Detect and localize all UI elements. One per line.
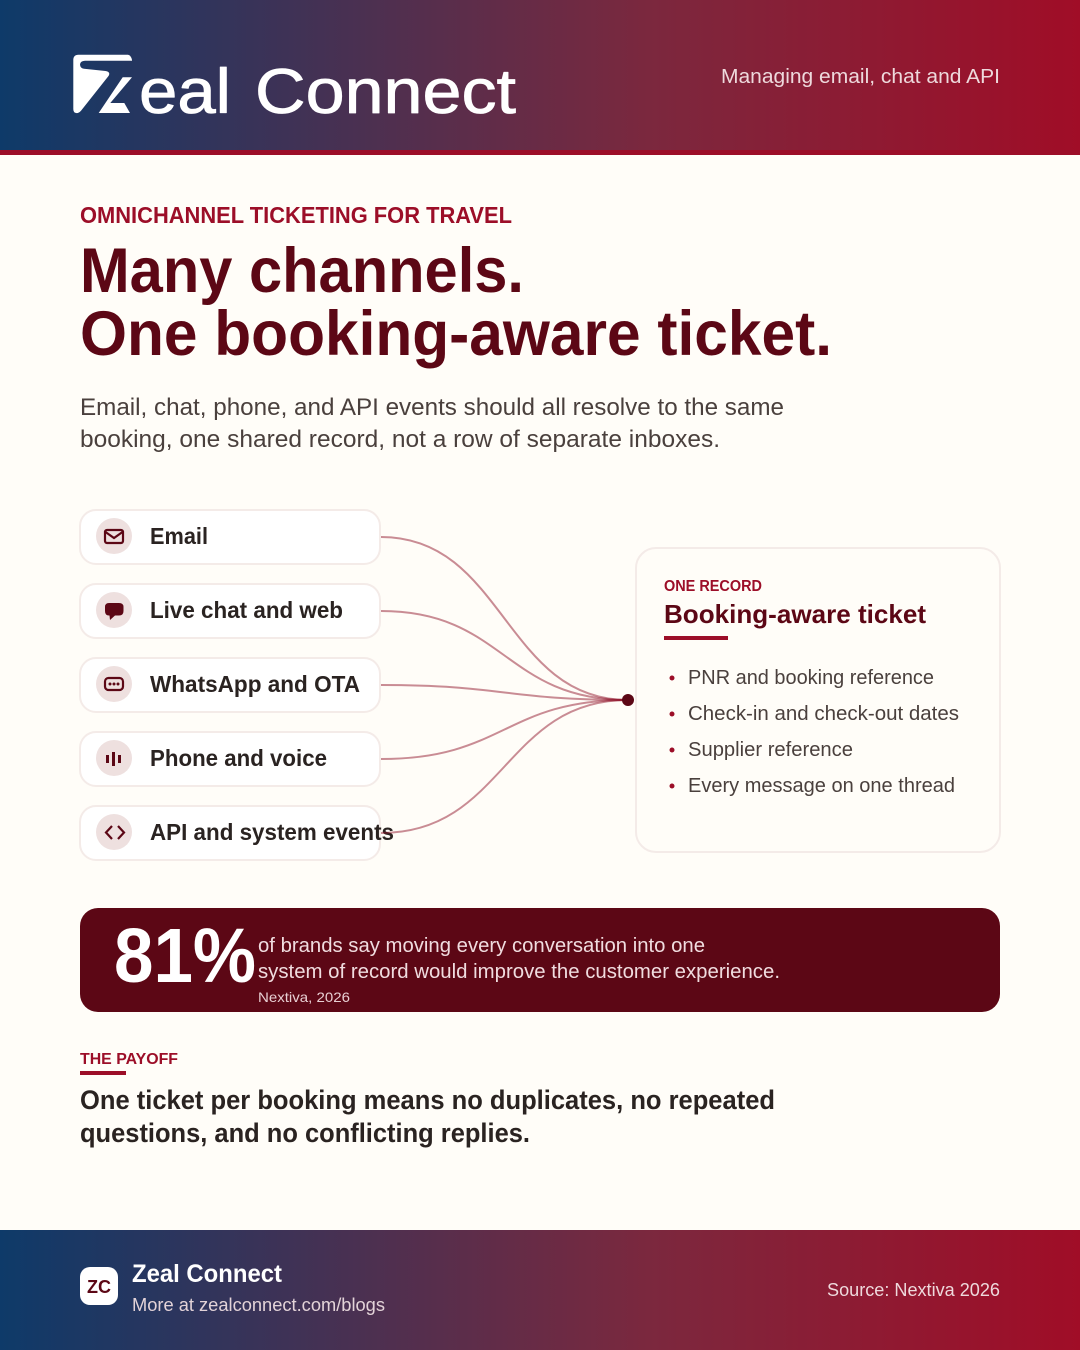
channel: Live chat and web <box>80 584 380 638</box>
channel: WhatsApp and OTA: WhatsApp and OTA <box>150 671 360 697</box>
stat number: 81% <box>114 913 256 999</box>
logo: Zeal Connect: Connect <box>255 57 517 127</box>
icon: envelope <box>105 530 123 543</box>
footer brand name: Zeal Connect <box>132 1260 283 1288</box>
footer source: Source: Nextiva 2026 <box>827 1280 1000 1300</box>
footer link: More at zealconnect.com/blogs <box>132 1295 385 1315</box>
payoff text: questions, and no conflicting replies. <box>80 1118 530 1148</box>
header tagline: Managing email, chat and API <box>721 66 1000 88</box>
logo: Zeal Connect: eal <box>139 57 231 127</box>
stat description <box>258 935 780 983</box>
title <box>80 236 832 369</box>
intro text: Email, chat, phone, and API events should all resolve to the same <box>80 394 784 421</box>
stat source: Nextiva, 2026 <box>258 989 350 1005</box>
field list <box>670 667 959 797</box>
channel: Phone and voice: Phone and voice <box>150 745 327 771</box>
panel heading: Booking-aware ticket <box>664 599 926 629</box>
logo: Zeal Connect <box>73 55 517 127</box>
channel: Email: Email <box>150 523 208 549</box>
channel: Live chat and web: Live chat and web <box>150 597 343 623</box>
hub dot <box>622 694 634 706</box>
field list: Supplier reference <box>688 739 853 761</box>
channel: API and system events <box>80 806 394 860</box>
title: Many channels. <box>80 236 524 306</box>
icon: voice bars <box>106 752 121 766</box>
channel: Phone and voice <box>80 732 380 786</box>
channel: API and system events: API and system events <box>150 819 394 845</box>
stat description: system of record would improve the customer experience. <box>258 961 780 983</box>
footer logo badge: ZC <box>87 1277 111 1297</box>
footer logo badge <box>80 1267 118 1305</box>
stat banner <box>80 908 1000 1012</box>
payoff text: One ticket per booking means no duplicates, no repeated <box>80 1085 775 1115</box>
channel: Email <box>80 510 380 564</box>
panel label: ONE RECORD <box>664 578 762 595</box>
payoff text <box>80 1085 775 1148</box>
panel: one record ticket <box>636 548 1000 852</box>
field list: Every message on one thread <box>688 775 955 797</box>
channel: WhatsApp and OTA <box>80 658 380 712</box>
intro text <box>80 394 784 453</box>
field list: Check-in and check-out dates <box>688 703 959 725</box>
icon: Z mark <box>73 55 132 113</box>
icon: code brackets <box>106 826 124 839</box>
header band <box>0 0 1080 155</box>
icon: message dots <box>105 678 123 690</box>
connector lines <box>381 537 628 833</box>
payoff label: THE PAYOFF <box>80 1051 178 1068</box>
stat description: of brands say moving every conversation into one <box>258 935 705 957</box>
title: One booking-aware ticket. <box>80 299 832 369</box>
icon: chat bubble <box>105 603 124 620</box>
field list: PNR and booking reference <box>688 667 934 689</box>
footer band <box>0 1230 1080 1350</box>
eyebrow: OMNICHANNEL TICKETING FOR TRAVEL <box>80 202 512 228</box>
intro text: booking, one shared record, not a row of separate inboxes. <box>80 426 720 453</box>
